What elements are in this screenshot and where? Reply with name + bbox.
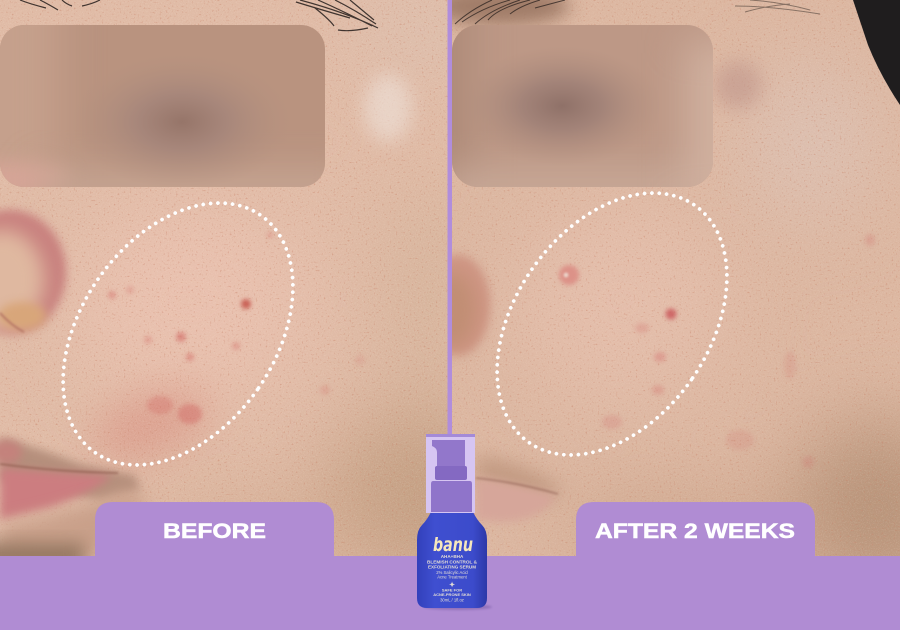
shiny highlight bbox=[364, 74, 412, 142]
label: after 2 weeks bbox=[576, 502, 815, 557]
shadow near eye bbox=[714, 61, 762, 109]
hair bbox=[853, 0, 900, 105]
bottle body bbox=[417, 512, 487, 608]
product text: 2% Salicylic Acid bbox=[436, 570, 468, 575]
brand logo: banu bbox=[433, 534, 473, 556]
product text: ACNE-PRONE SKIN bbox=[433, 592, 471, 597]
dotted circle: after bbox=[450, 150, 774, 498]
product text: ✦ bbox=[449, 581, 455, 589]
acne marks bbox=[108, 232, 365, 424]
acne marks bbox=[559, 234, 875, 468]
lips bbox=[0, 438, 150, 568]
panel: blurred eye area after bbox=[452, 25, 713, 187]
bottom bar bbox=[0, 556, 900, 630]
panel: before photo bbox=[0, 0, 448, 556]
product text: AHA+BHA bbox=[441, 554, 464, 559]
product text: Acne Treatment bbox=[437, 574, 468, 580]
dotted circle: before bbox=[16, 160, 340, 508]
panel: blurred eye area before bbox=[0, 25, 325, 187]
label: before bbox=[95, 502, 334, 557]
pump bbox=[432, 440, 465, 467]
product text bbox=[427, 554, 478, 602]
label: before: BEFORE bbox=[163, 520, 266, 543]
panel: after photo bbox=[452, 0, 900, 556]
nose bbox=[452, 252, 494, 360]
eyelashes bbox=[20, 0, 378, 31]
product text: BLEMISH CONTROL & bbox=[427, 560, 478, 564]
eyelashes bbox=[455, 0, 820, 24]
product text: 30mL / 1fl.oz bbox=[440, 598, 464, 602]
label: after 2 weeks: AFTER 2 WEEKS bbox=[595, 520, 795, 543]
product text: EXFOLIATING SERUM bbox=[428, 564, 476, 570]
divider bbox=[448, 0, 452, 440]
product text: SAFE FOR bbox=[442, 588, 462, 592]
lips bbox=[476, 455, 565, 522]
clear cap bbox=[426, 434, 475, 513]
product: serum bottle bbox=[417, 434, 492, 610]
brow shadow bbox=[430, 0, 570, 26]
nose bbox=[0, 210, 66, 334]
